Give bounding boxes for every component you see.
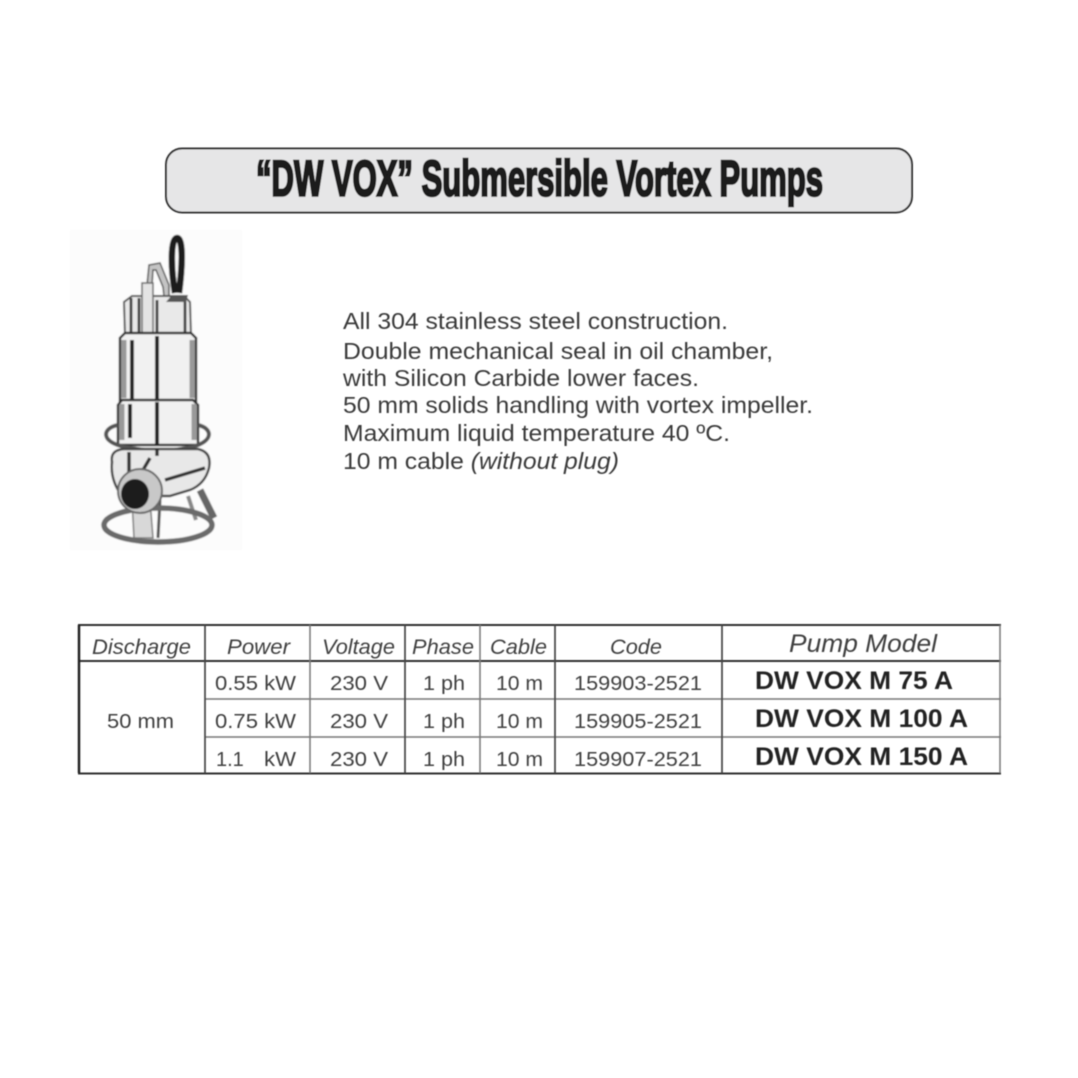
feature description: All 304 stainless steel construction. xyxy=(343,308,728,334)
volute shading xyxy=(129,448,205,480)
row: DW VOX M 75 A xyxy=(215,667,953,695)
lower motor section xyxy=(118,400,198,445)
table header: Phase xyxy=(412,636,474,659)
table grid xyxy=(78,625,1001,774)
title banner xyxy=(166,148,912,212)
feature description xyxy=(342,308,813,474)
base stand legs xyxy=(132,500,153,538)
row: DW VOX M 150 A: DW VOX M 150 A xyxy=(755,743,968,771)
icon: lifting handle xyxy=(147,263,169,296)
table header: Power xyxy=(227,636,291,659)
row: DW VOX M 100 A xyxy=(215,705,968,733)
feature description: with Silicon Carbide lower faces. xyxy=(342,365,699,391)
middle motor section xyxy=(120,333,196,402)
specifications table xyxy=(78,625,1001,774)
table header: Cable xyxy=(490,636,547,659)
icon: power cable loop xyxy=(172,238,182,293)
feature description: 10 m cable (without plug) xyxy=(343,448,619,474)
top motor section xyxy=(124,296,191,335)
feature description: Maximum liquid temperature 40 ºC. xyxy=(343,420,730,446)
flange ring xyxy=(106,425,209,451)
row: DW VOX M 75 A: 10 m xyxy=(496,673,543,695)
row: DW VOX M 75 A: 0.55 kW xyxy=(215,673,296,695)
row: DW VOX M 150 A: 1 ph xyxy=(423,749,465,771)
top section facets xyxy=(131,298,185,335)
row: DW VOX M 150 A: 10 m xyxy=(496,749,543,771)
row: DW VOX M 150 A: 230 V xyxy=(330,749,389,771)
row: DW VOX M 150 A: 1.1 xyxy=(216,749,244,771)
row: DW VOX M 75 A: DW VOX M 75 A xyxy=(755,667,953,695)
row: DW VOX M 100 A: 159905-2521 xyxy=(574,711,702,733)
row: DW VOX M 100 A: 0.75 kW xyxy=(215,711,296,733)
row: DW VOX M 75 A: 159903-2521 xyxy=(574,673,702,695)
table header: Code xyxy=(610,636,662,659)
discharge pipe xyxy=(118,469,162,513)
row: DW VOX M 100 A: 1 ph xyxy=(423,711,465,733)
base ring xyxy=(104,508,212,542)
table header: Pump Model xyxy=(789,630,939,658)
discharge cell: 50 mm xyxy=(107,711,174,733)
row: DW VOX M 150 A: 159907-2521 xyxy=(574,749,702,771)
row: DW VOX M 75 A: 1 ph xyxy=(423,673,465,695)
volute casing xyxy=(112,449,210,496)
table header: Discharge xyxy=(92,636,191,659)
row: DW VOX M 75 A: 230 V xyxy=(330,673,389,695)
row: DW VOX M 100 A: 230 V xyxy=(330,711,389,733)
cable gland xyxy=(166,295,188,302)
lower section facets xyxy=(130,402,157,445)
middle section facets xyxy=(132,336,157,400)
row: DW VOX M 150 A xyxy=(216,743,968,771)
table header: Voltage xyxy=(322,636,395,659)
row: DW VOX M 100 A: 10 m xyxy=(496,711,543,733)
pump photo illustration xyxy=(70,230,242,550)
handle strap front xyxy=(142,283,153,337)
feature description: 50 mm solids handling with vortex impeller. xyxy=(343,392,813,418)
row: DW VOX M 150 A: kW xyxy=(264,749,296,771)
row: DW VOX M 100 A: DW VOX M 100 A xyxy=(755,705,968,733)
table header xyxy=(92,630,939,659)
feature description: Double mechanical seal in oil chamber, xyxy=(343,338,773,364)
